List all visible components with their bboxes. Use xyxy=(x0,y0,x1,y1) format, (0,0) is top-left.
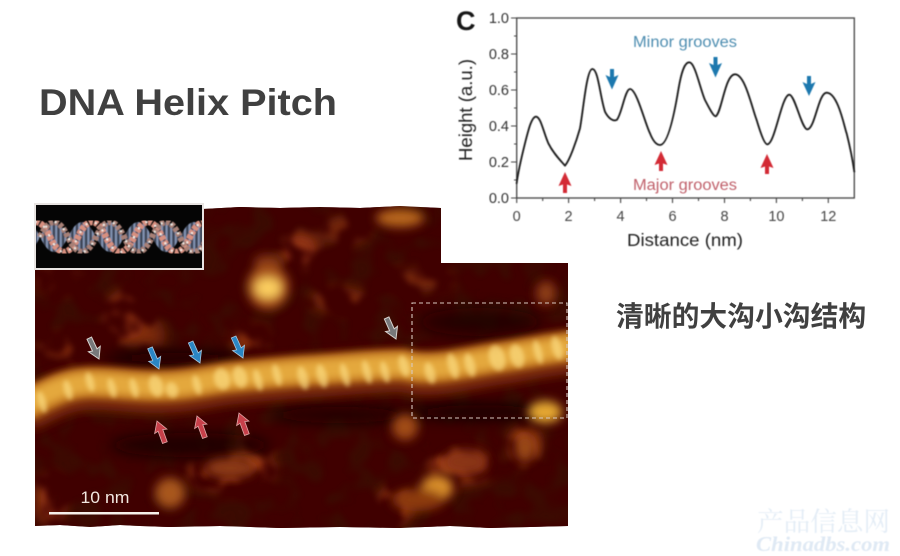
dashed selection box xyxy=(412,303,567,418)
x axis tick labels: 0 xyxy=(513,209,521,225)
x axis tick labels: 6 xyxy=(668,209,677,225)
background texture blobs xyxy=(35,215,541,525)
major grooves label: Major grooves xyxy=(633,177,737,194)
profile curve xyxy=(517,62,854,183)
blue arrows xyxy=(147,336,245,370)
watermark: 产品信息网 xyxy=(757,500,890,539)
x axis tick labels: 2 xyxy=(565,209,573,225)
y axis tick labels: 0.0 xyxy=(489,191,509,207)
y axis tick labels xyxy=(489,11,509,207)
minor grooves label: Minor grooves xyxy=(633,34,737,51)
watermark xyxy=(756,500,890,556)
scale bar: 10 nm xyxy=(80,488,130,507)
AFM image of DNA strand xyxy=(25,200,575,535)
x axis tick labels: 4 xyxy=(617,209,625,225)
blue arrows: minor grooves xyxy=(606,57,816,96)
y axis title: Height (a.u.) xyxy=(456,59,476,161)
particles xyxy=(155,209,562,511)
y axis tick labels: 0.6 xyxy=(489,83,509,99)
watermark: Chinadbs.com xyxy=(756,532,890,556)
x axis tick labels: 12 xyxy=(820,209,836,225)
dark patches xyxy=(105,308,550,457)
strand one xyxy=(22,222,218,252)
chart frame and ticks xyxy=(511,18,854,203)
x axis tick labels: 10 xyxy=(768,209,784,225)
base pairs between strands xyxy=(12,222,208,252)
inset: DNA double helix model xyxy=(34,203,204,270)
chart: height profile of DNA along distance xyxy=(456,6,854,250)
panel letter C: C xyxy=(456,6,476,36)
y axis tick labels: 0.2 xyxy=(489,155,509,171)
mottled dark noise xyxy=(30,200,575,535)
title: DNA Helix Pitch xyxy=(39,82,337,123)
x axis title: Distance (nm) xyxy=(627,230,743,250)
y axis tick labels: 0.8 xyxy=(489,47,509,63)
red arrows: major grooves xyxy=(558,151,774,193)
x axis tick labels: 8 xyxy=(720,209,729,225)
DNA strand xyxy=(25,352,575,411)
scale bar xyxy=(49,492,159,514)
y axis tick labels: 0.4 xyxy=(489,119,509,135)
caption: 清晰的大沟小沟结构 xyxy=(616,295,866,335)
strand two xyxy=(40,222,208,252)
grey arrows xyxy=(83,315,402,362)
strand beads xyxy=(35,335,565,414)
red arrows xyxy=(154,412,250,444)
y axis tick labels: 1.0 xyxy=(489,11,509,27)
x axis tick labels xyxy=(513,209,836,225)
